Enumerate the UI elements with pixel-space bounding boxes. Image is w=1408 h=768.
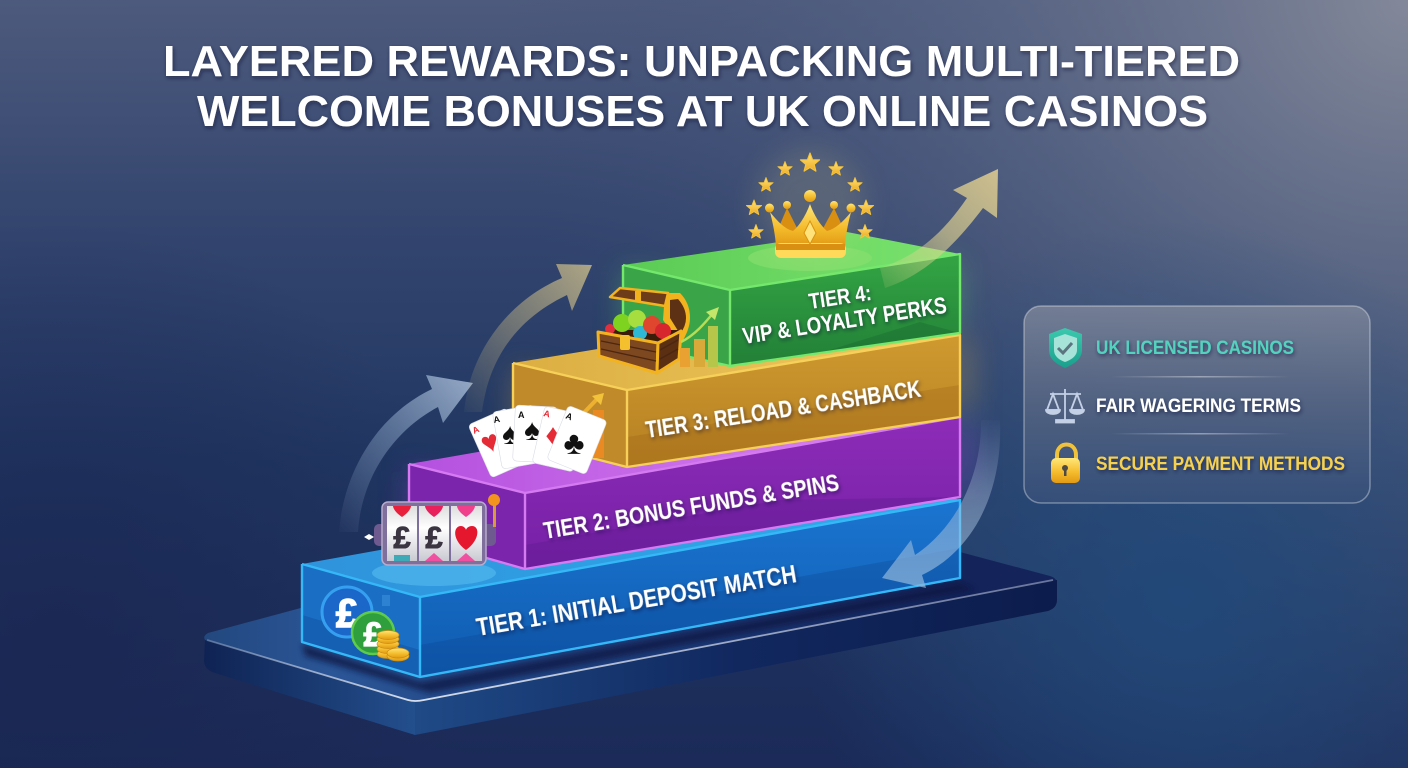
title: LAYERED REWARDS: UNPACKING MULTI-TIERED [163, 37, 1240, 86]
tier 4 block [623, 232, 960, 366]
icon: treasure chest [598, 288, 690, 373]
panel: trust badges [1024, 306, 1370, 503]
icon: padlock [1051, 444, 1080, 483]
icon: playing cards: A [493, 414, 501, 425]
icon: shield [1049, 328, 1082, 368]
icon: playing cards: ♦ [545, 419, 561, 452]
glow behind tiers [409, 262, 972, 560]
arrow: tier 4 upward [880, 169, 998, 288]
icon: crown and stars [746, 149, 874, 271]
icon: pound coins: £ [364, 616, 383, 654]
icon: playing cards: ♠ [502, 418, 518, 451]
tier 3 label: TIER 3: RELOAD & CASHBACK [644, 376, 923, 444]
title [163, 37, 1240, 136]
tier 1 label: TIER 1: INITIAL DEPOSIT MATCH [474, 560, 798, 642]
tier 2 label: TIER 2: BONUS FUNDS & SPINS [542, 469, 841, 545]
tier 3 block [513, 308, 960, 467]
arrow: return downward [882, 420, 1000, 588]
icon: green growth chart [680, 307, 719, 367]
icon: slot machine: £ [393, 520, 411, 555]
icon: playing cards: A [471, 424, 481, 436]
tier 4 label: TIER 4: [807, 280, 873, 314]
icon: orange growth chart [562, 393, 604, 458]
icon: playing cards [468, 405, 607, 478]
icon: slot machine [364, 494, 500, 586]
icon: pound coins [322, 587, 409, 661]
tier 4 label: VIP & LOYALTY PERKS [741, 292, 948, 349]
icon: playing cards: ♠ [524, 414, 540, 447]
icon: slot machine: £ [425, 520, 443, 555]
icon: playing cards: A [518, 410, 525, 420]
base platform [204, 500, 1057, 735]
icon: playing cards: ♥ [476, 424, 504, 461]
icon: playing cards: A [543, 408, 552, 420]
icon: playing cards: A [564, 411, 574, 422]
tier 2 block [409, 388, 960, 569]
icon: pound coins: £ [336, 592, 358, 636]
icon: playing cards: ♣ [564, 425, 584, 461]
icon: scales [1046, 389, 1084, 422]
tier 1 block [302, 467, 975, 693]
arrow: tier 2 to tier 3 [464, 264, 592, 412]
arrow: tier 1 to tier 2 [339, 375, 473, 532]
label: fair wagering terms: FAIR WAGERING TERMS [1096, 396, 1301, 417]
label: secure payment methods: SECURE PAYMENT METHODS [1096, 454, 1345, 475]
title: WELCOME BONUSES AT UK ONLINE CASINOS [197, 87, 1208, 136]
label: UK licensed casinos: UK LICENSED CASINOS [1096, 338, 1294, 359]
